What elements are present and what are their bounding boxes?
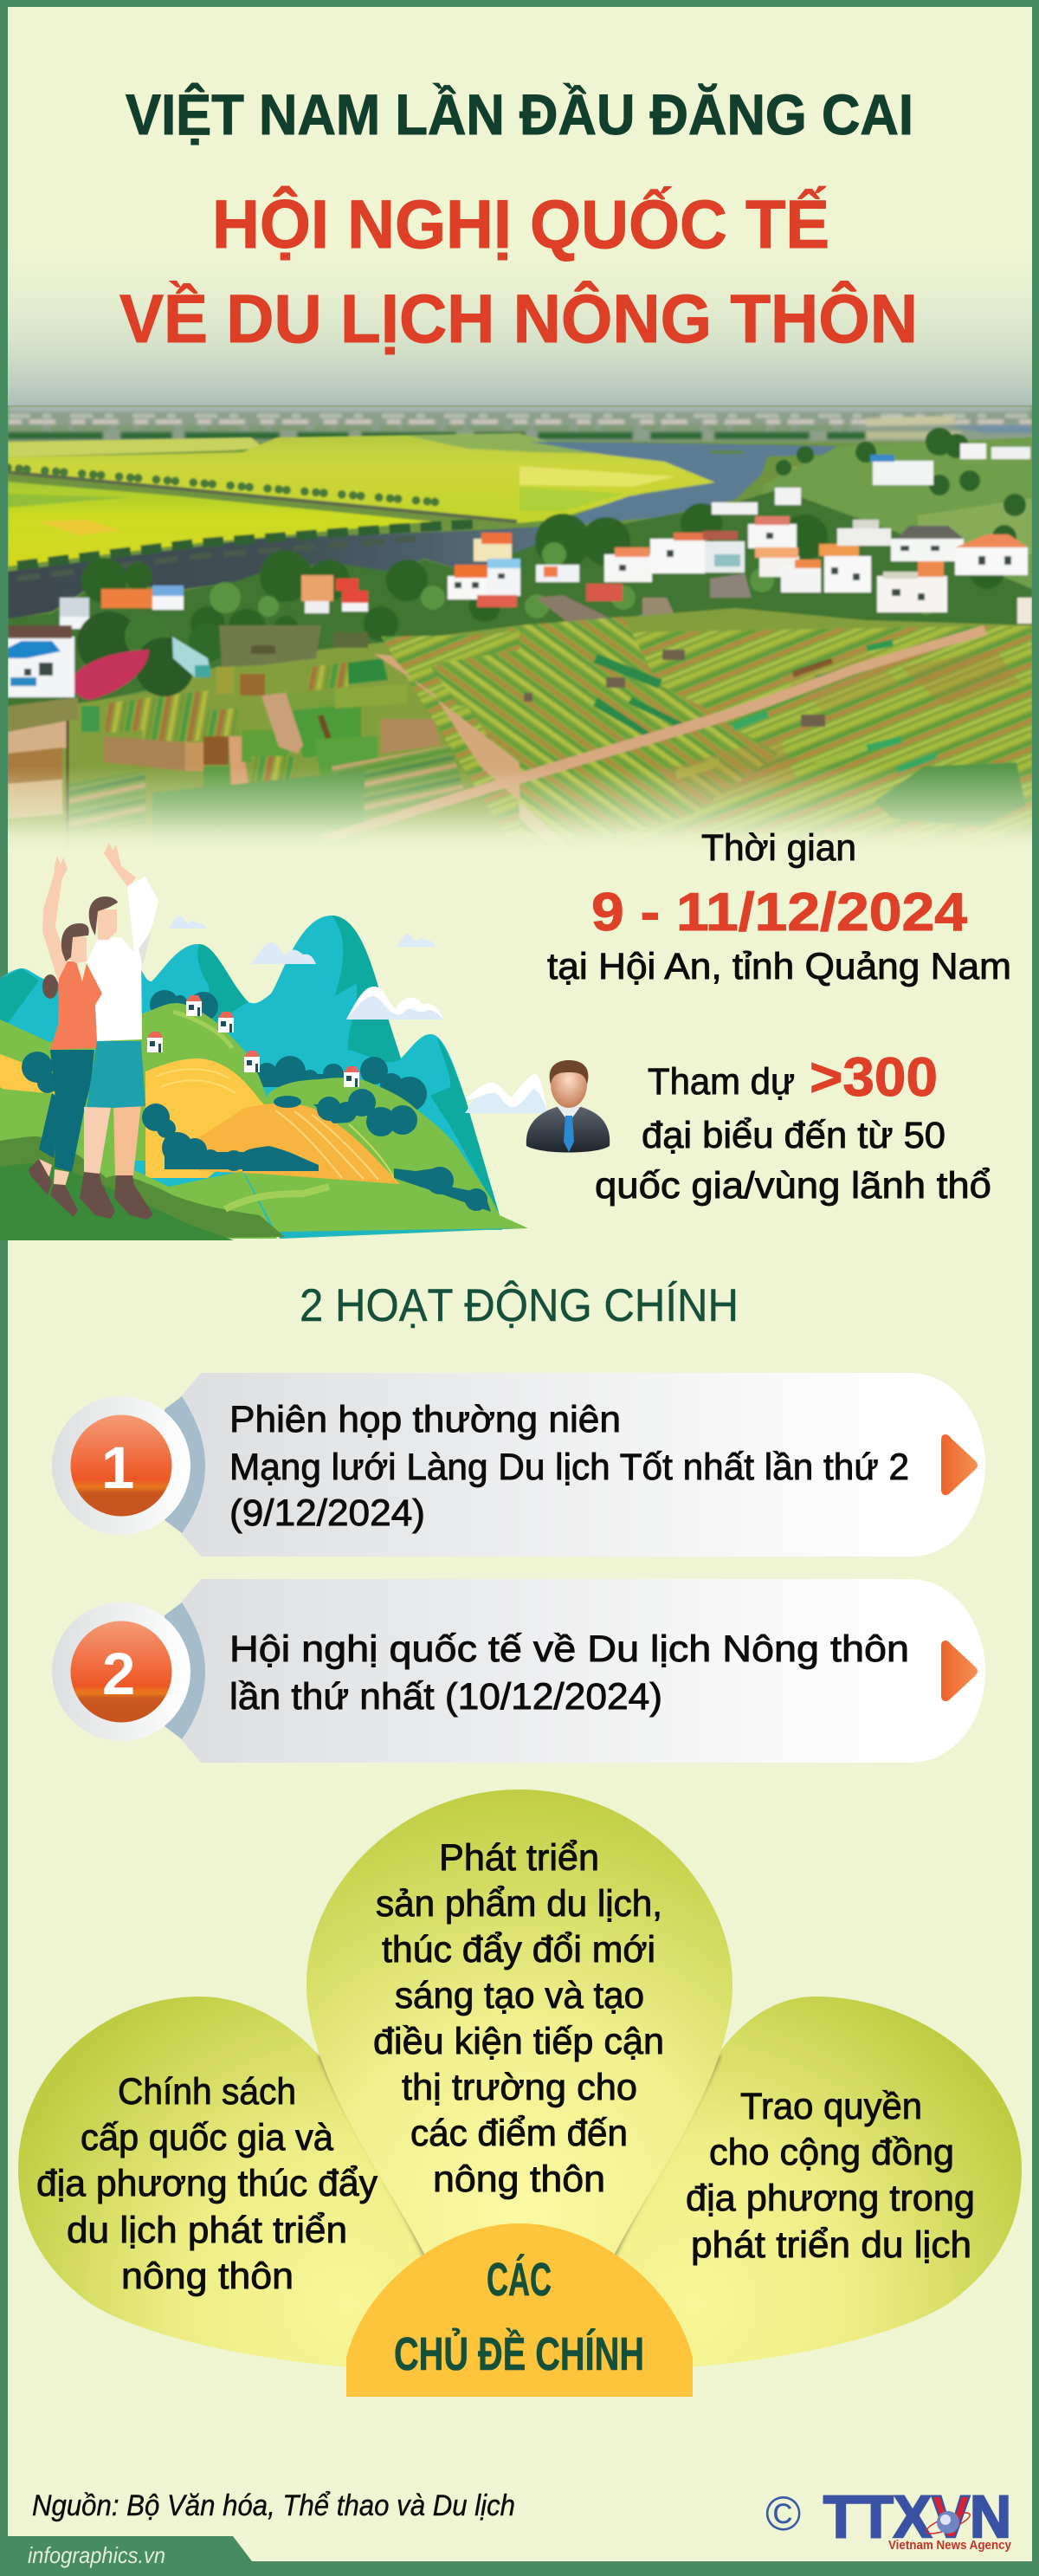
right petal: cho cộng đồng xyxy=(709,2132,954,2173)
right petal: địa phương trong xyxy=(686,2178,975,2219)
left petal: du lịch phát triển xyxy=(67,2210,347,2251)
attendance text: Tham dự xyxy=(648,1061,795,1103)
event time and place: tại Hội An, tỉnh Quảng Nam xyxy=(547,946,1011,987)
number badge 1: 1 xyxy=(101,1434,134,1501)
logo: TTXVN: TTXVN xyxy=(823,2483,1011,2550)
road and palm row xyxy=(8,472,517,521)
river front xyxy=(8,525,606,619)
right green hill xyxy=(242,1078,528,1239)
arrow xyxy=(941,1641,978,1701)
left petal: địa phương thúc đẩy xyxy=(36,2163,378,2204)
blue arc xyxy=(165,1602,205,1739)
activity 1 text: Phiên họp thường niên xyxy=(229,1399,621,1440)
far rice strip xyxy=(8,437,264,457)
houses xyxy=(60,443,1032,629)
illustration: couple in mountain landscape xyxy=(0,843,547,1240)
left petal xyxy=(18,1997,433,2367)
panel: main themes petals xyxy=(18,1790,1022,2397)
gold center label: CÁC xyxy=(487,2254,552,2306)
dirt roads xyxy=(374,654,520,801)
right side green hillside xyxy=(762,437,1032,624)
left village: white house, bougainvillea and trees xyxy=(8,612,368,732)
attendance text: >300 xyxy=(810,1047,938,1108)
number badge 2: 2 xyxy=(102,1641,135,1707)
river strip xyxy=(280,1228,520,1239)
gold center label xyxy=(346,2223,693,2397)
title xyxy=(119,82,918,357)
orange field xyxy=(199,1104,400,1184)
activity 1 text: (9/12/2024) xyxy=(229,1492,425,1534)
distant town xyxy=(8,405,1032,442)
attendance text: đại biểu đến từ 50 xyxy=(642,1115,945,1156)
activity 2 text: Hội nghị quốc tế về Du lịch Nông thôn xyxy=(229,1628,909,1670)
center petal: thúc đẩy đổi mới xyxy=(382,1929,655,1971)
arrow xyxy=(941,1434,978,1495)
center petal xyxy=(307,1790,732,2261)
copyright mark: © xyxy=(765,2486,801,2540)
petal edge shadows xyxy=(320,2055,719,2261)
photo: rural village and rice fields xyxy=(8,405,1032,858)
front rice field xyxy=(8,482,433,566)
center petal: điều kiện tiếp cận xyxy=(373,2021,664,2062)
dark tree clusters xyxy=(22,1052,491,1212)
website tab: infographics.vn xyxy=(28,2542,165,2568)
man figure xyxy=(80,843,158,1220)
mountains xyxy=(0,916,502,1230)
center petal: nông thôn xyxy=(433,2159,605,2200)
activity 1 text xyxy=(229,1399,909,1534)
activity 1 text: Mạng lưới Làng Du lịch Tốt nhất lần thứ 2 xyxy=(229,1447,909,1488)
number badge 2 xyxy=(52,1602,190,1741)
number badge 1 xyxy=(52,1396,190,1535)
left petal: nông thôn xyxy=(121,2256,294,2297)
center petal: các điểm đến xyxy=(410,2113,628,2154)
photo fade into background xyxy=(8,767,1032,853)
logo: TTXVN: Vietnam News Agency xyxy=(888,2538,1012,2553)
right petal: phát triển du lịch xyxy=(691,2224,971,2266)
center petal: thị trường cho xyxy=(402,2067,637,2108)
center petal: sản phẩm du lịch, xyxy=(376,1883,662,1925)
woman figure xyxy=(29,856,102,1217)
sky gradient xyxy=(8,7,1032,409)
yellow fields xyxy=(145,1058,277,1178)
center petal: Phát triển xyxy=(439,1837,599,1879)
village houses in illustration xyxy=(147,995,359,1087)
title: HỘI NGHỊ QUỐC TẾ xyxy=(212,185,829,262)
field huts xyxy=(524,650,825,727)
foreground hills xyxy=(0,1089,277,1239)
clouds xyxy=(169,916,547,1113)
section heading: 2 HOẠT ĐỘNG CHÍNH xyxy=(300,1279,739,1331)
source note: Nguồn: Bộ Văn hóa, Thể thao và Du lịch xyxy=(32,2489,515,2522)
panel: activity 1 xyxy=(52,1373,985,1557)
farmland xyxy=(62,606,1023,814)
dark trees behind hills xyxy=(150,990,427,1111)
panel: activity 2 xyxy=(52,1579,985,1763)
village tree canopy xyxy=(8,489,1032,719)
website tab xyxy=(0,2536,1039,2576)
title: VỀ DU LỊCH NÔNG THÔN xyxy=(119,280,918,357)
activity 2 text xyxy=(229,1628,909,1718)
blue arc xyxy=(165,1396,205,1533)
event time and place xyxy=(547,827,1011,987)
left petal: Chính sách xyxy=(118,2071,296,2113)
right petal xyxy=(606,1997,1022,2367)
green hills xyxy=(0,1003,286,1161)
left petal: cấp quốc gia và xyxy=(81,2117,333,2159)
main rice field xyxy=(8,433,715,523)
icon: delegate in suit xyxy=(526,1060,610,1152)
right petal: Trao quyền xyxy=(740,2086,922,2127)
gold center label: CHỦ ĐỀ CHÍNH xyxy=(394,2328,644,2380)
center petal: sáng tạo và tạo xyxy=(395,1975,644,2016)
lake and river xyxy=(529,442,837,525)
activity 2 text: lần thứ nhất (10/12/2024) xyxy=(229,1676,662,1718)
event time and place: 9 - 11/12/2024 xyxy=(591,883,968,942)
attendance text xyxy=(595,1047,991,1207)
attendance text: quốc gia/vùng lãnh thổ xyxy=(595,1165,991,1207)
event time and place: Thời gian xyxy=(701,827,856,869)
title: VIỆT NAM LẦN ĐẦU ĐĂNG CAI xyxy=(126,82,913,146)
